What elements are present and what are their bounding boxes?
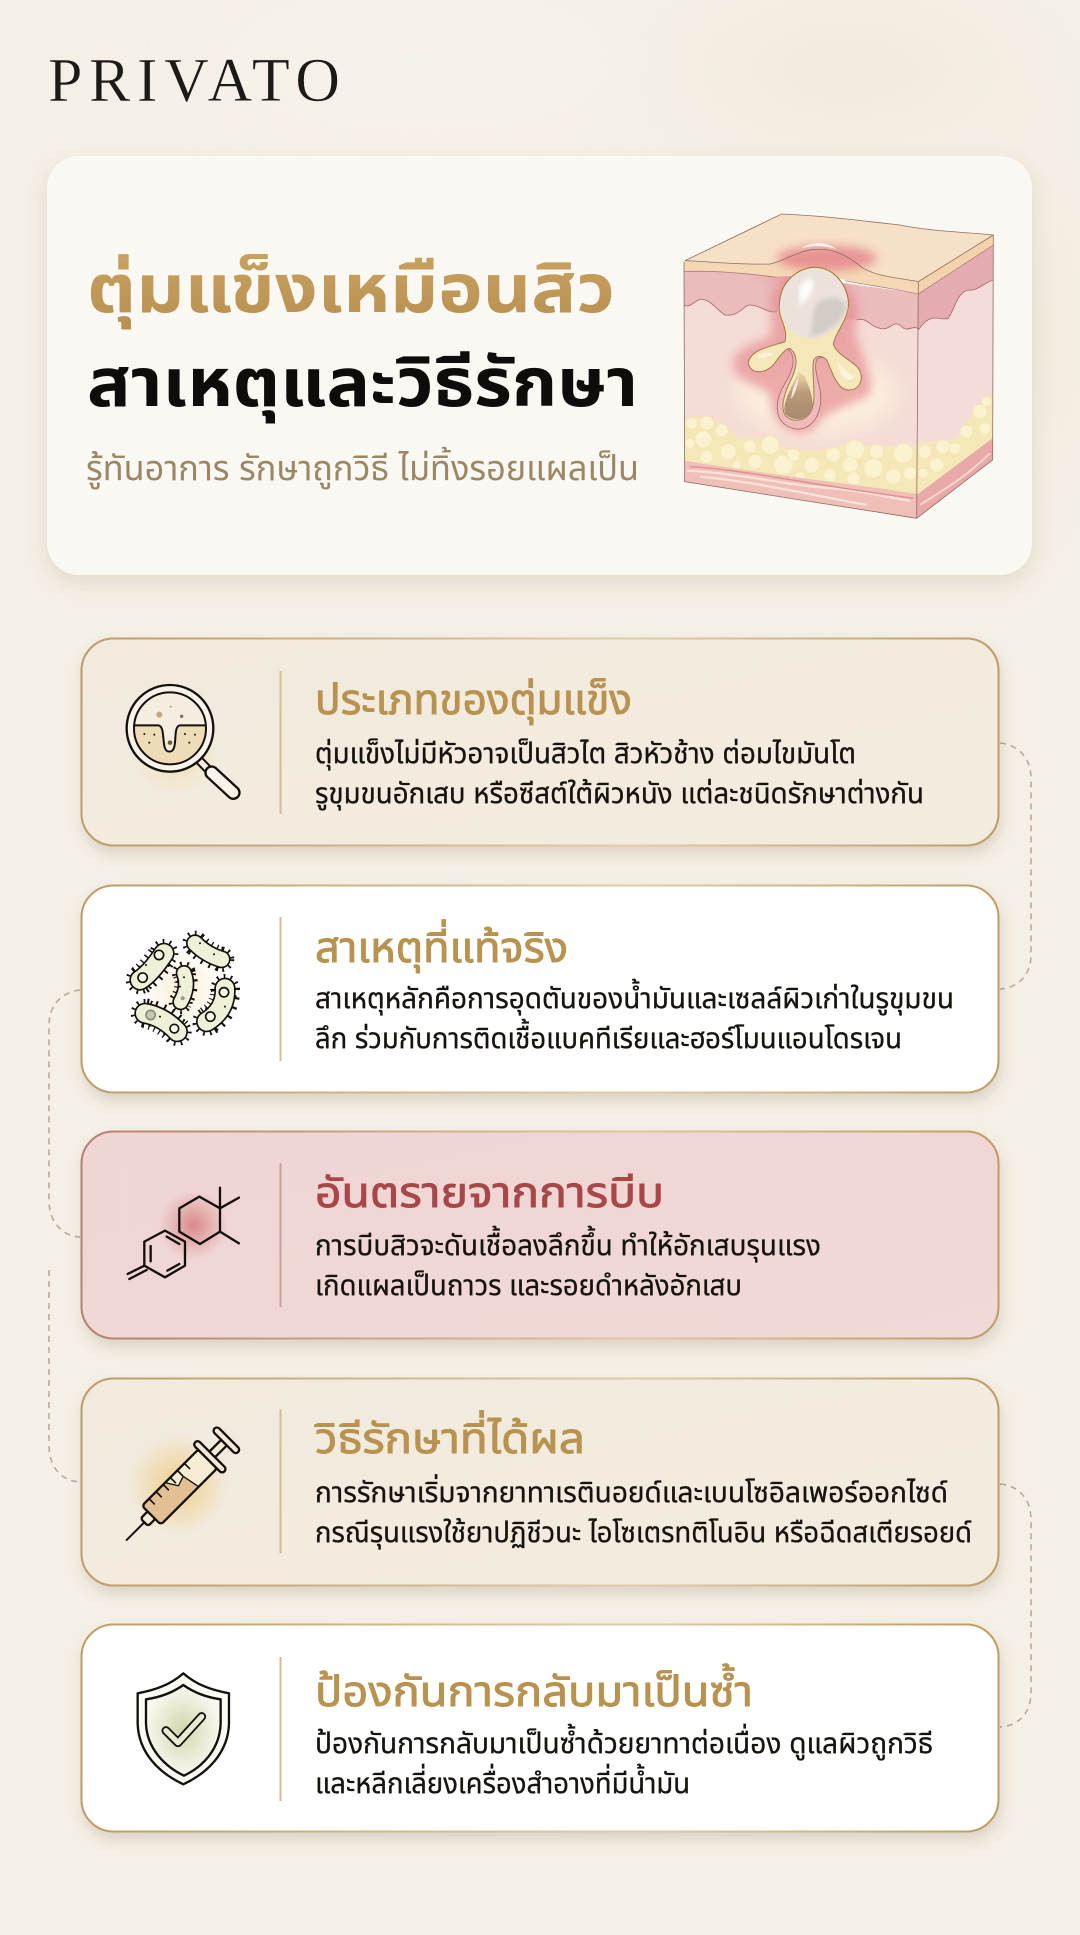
heading: hero title line 2: สาเหตุและวิธีรักษา	[87, 345, 638, 424]
body text: และหลีกเลี่ยงเครื่องสำอางที่มีน้ำมัน	[315, 1763, 690, 1800]
subtitle: รู้ทันอาการ รักษาถูกวิธี ไม่ทิ้งรอยแผลเป็น	[86, 446, 639, 489]
connector: card 3 to card 4	[49, 1270, 80, 1482]
front face	[684, 262, 918, 518]
panel: hero	[47, 156, 1032, 575]
title: สาเหตุที่แท้จริง	[315, 919, 568, 973]
body text: เกิดแผลเป็นถาวร และรอยดำหลังอักเสบ	[315, 1270, 742, 1302]
connector: card 2 to card 3	[49, 990, 80, 1237]
body text	[315, 1225, 821, 1302]
body text: ป้องกันการกลับมาเป็นซ้ำด้วยยาทาต่อเนื่อง ดูแลผิวถูกวิธี	[315, 1723, 933, 1761]
body text	[315, 1474, 972, 1549]
body text	[315, 738, 924, 811]
panel: danger of squeezing	[82, 1132, 998, 1338]
panel: types of lumps	[82, 638, 998, 846]
icon: shield with check	[138, 1673, 229, 1784]
body text: สาเหตุหลักคือการอุดตันของน้ำมันและเซลล์ผิวเก่าในรูขุมขน	[315, 978, 954, 1016]
body text: รูขุมขนอักเสบ หรือซีสต์ใต้ผิวหนัง แต่ละชนิดรักษาต่างกัน	[315, 778, 924, 811]
lesion: bulb, arms, neck	[748, 267, 861, 420]
top surface	[685, 214, 993, 282]
title: วิธีรักษาที่ได้ผล	[314, 1410, 585, 1462]
body text: ลึก ร่วมกับการติดเชื้อแบคทีเรียและฮอร์โมนแอนโดรเจน	[315, 1018, 902, 1055]
body text: กรณีรุนแรงใช้ยาปฏิชีวนะ ไอโซเตรทติโนอิน หรือฉีดสเตียรอยด์	[315, 1517, 972, 1549]
heading: hero title line 1: ตุ่มแข็งเหมือนสิว	[87, 251, 615, 330]
panel: true causes	[82, 886, 998, 1092]
body text	[315, 978, 954, 1055]
body text: การรักษาเริ่มจากยาทาเรตินอยด์และเบนโซอิลเพอร์ออกไซด์	[315, 1474, 948, 1509]
outlines	[684, 214, 993, 518]
illustration: skin cross-section with acne nodule	[680, 214, 993, 520]
title: อันตรายจากการบีบ	[315, 1169, 664, 1216]
body text	[315, 1723, 933, 1800]
logo: PRIVATO: PRIVATO	[48, 47, 340, 115]
fat layer	[684, 416, 918, 495]
icon: magnifying glass over skin	[127, 685, 233, 795]
bulb highlight	[780, 269, 847, 339]
panel: prevent recurrence	[82, 1624, 998, 1832]
body text: ตุ่มแข็งไม่มีหัวอาจเป็นสิวไต สิวหัวช้าง ต่อมไขมันโต	[315, 738, 856, 770]
icon: bacteria	[128, 933, 237, 1043]
connector: card 4 to card 5	[1000, 1484, 1031, 1727]
icon: syringe	[112, 1423, 243, 1555]
title: ป้องกันการกลับมาเป็นซ้ำ	[315, 1663, 753, 1715]
deep tissue band	[684, 461, 918, 520]
lesion: outer sac	[777, 347, 827, 429]
side face	[917, 235, 993, 518]
title: ประเภทของตุ่มแข็ง	[315, 676, 632, 725]
brown core	[784, 372, 813, 419]
connector: card 1 to card 2	[1000, 743, 1031, 989]
icon: molecule	[128, 1188, 239, 1279]
panel: effective treatment	[82, 1378, 998, 1586]
body text: การบีบสิวจะดันเชื้อลงลึกขึ้น ทำให้อักเสบรุนแรง	[315, 1225, 821, 1262]
